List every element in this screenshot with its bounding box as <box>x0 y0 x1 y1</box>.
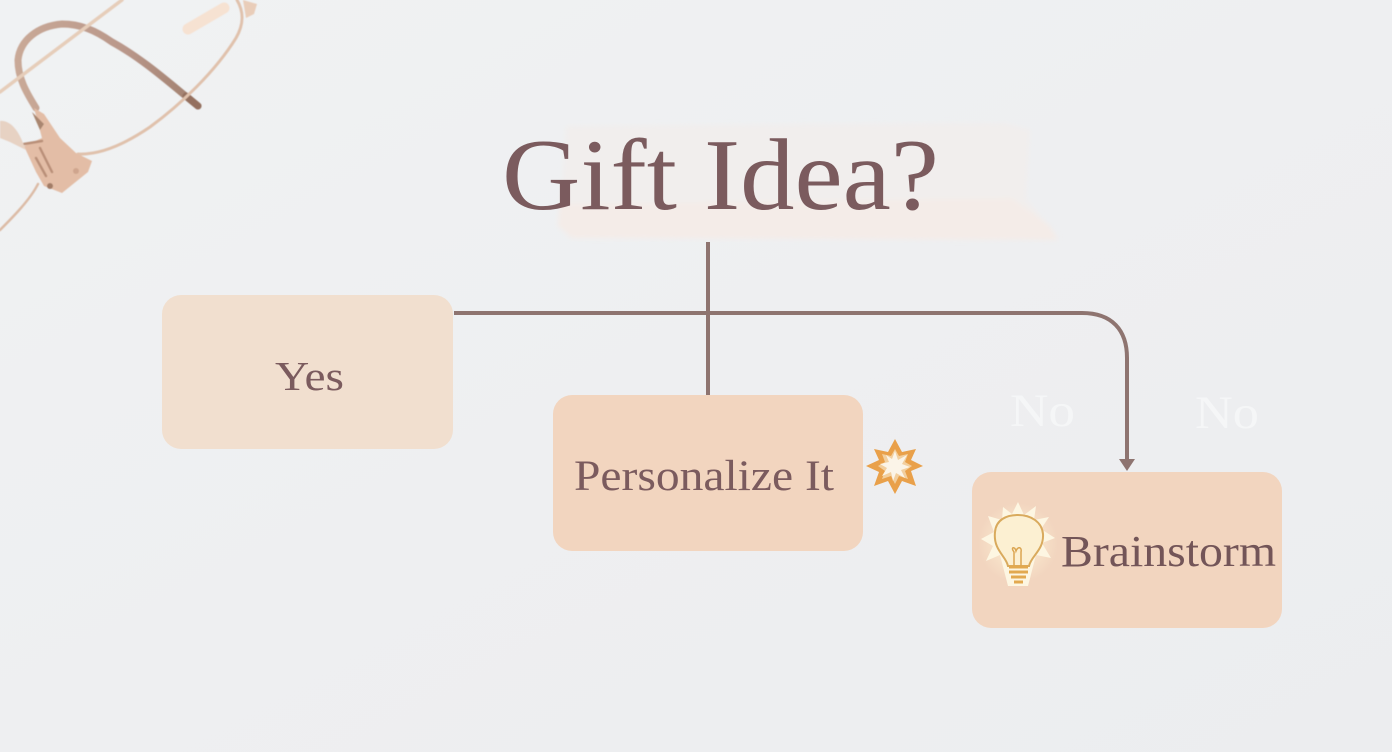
faint label: No (left): No <box>1010 385 1075 437</box>
box: Yes: Yes <box>275 353 344 399</box>
title: Gift Idea? <box>502 119 939 232</box>
icon: light bulb <box>978 502 1058 586</box>
box: Brainstorm: Brainstorm <box>1061 527 1276 576</box>
title brush highlight <box>558 123 1058 240</box>
icon: orange star <box>866 439 923 494</box>
arrow head <box>1119 459 1135 471</box>
box: Personalize It: Personalize It <box>574 453 834 500</box>
box: Brainstorm <box>972 472 1282 628</box>
connector lines <box>454 242 1127 460</box>
box: Personalize It <box>553 395 863 551</box>
photo: rose gold glasses <box>0 0 257 230</box>
faint label: No (right): No <box>1195 387 1259 439</box>
box: Yes <box>162 295 453 449</box>
